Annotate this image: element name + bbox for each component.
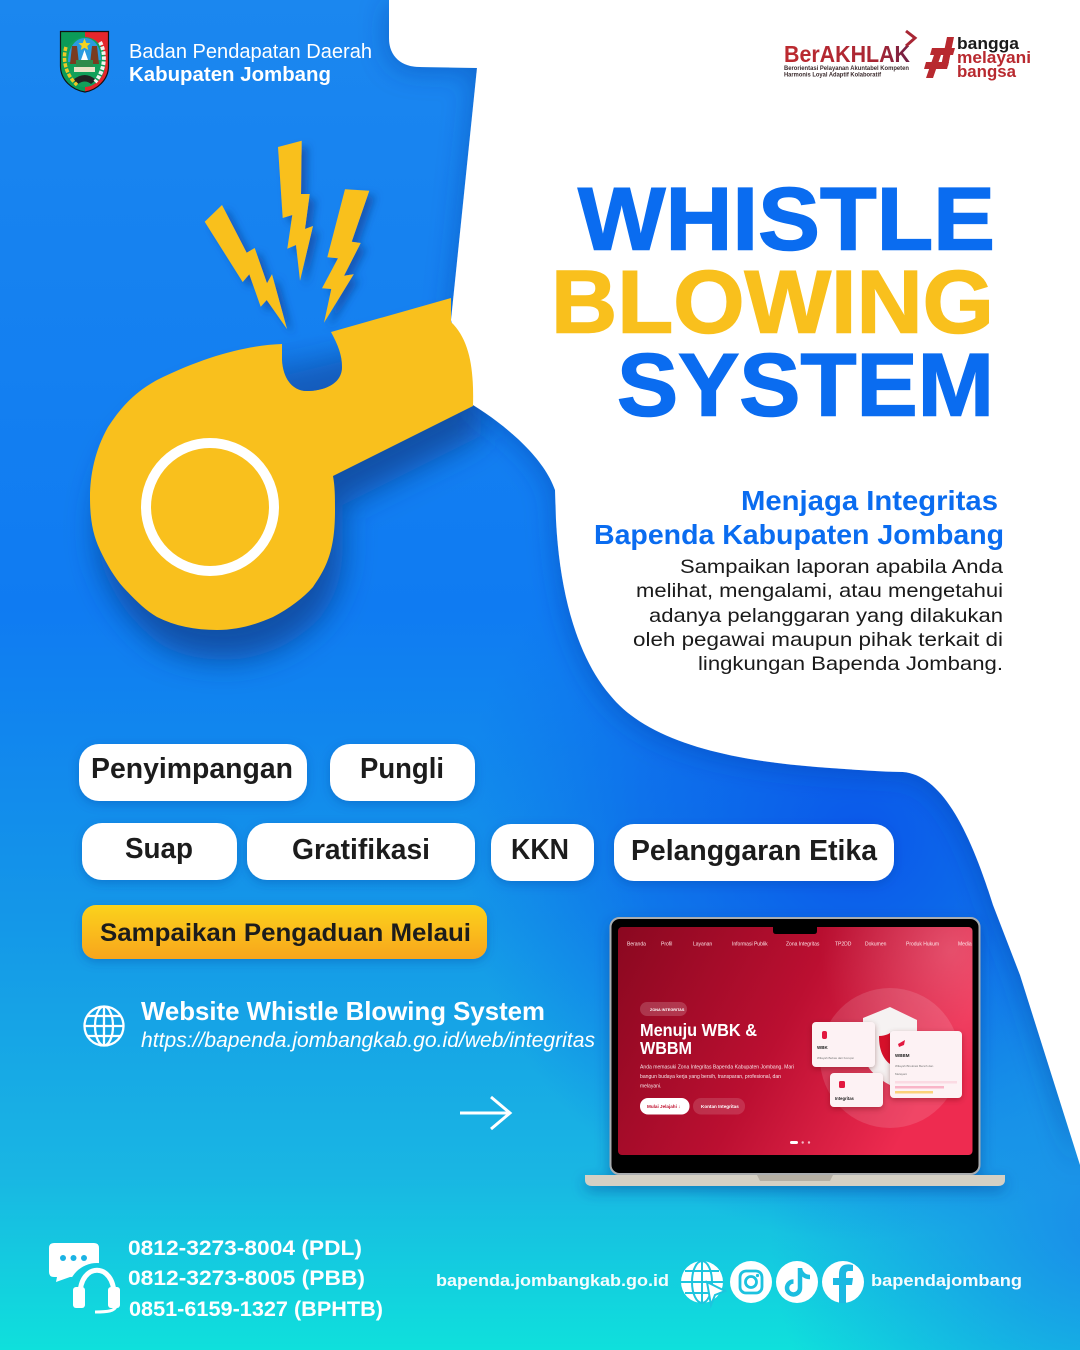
- tag: KKN: KKN: [511, 834, 569, 866]
- description text: oleh pegawai maupun pihak terkait di: [633, 629, 1003, 651]
- header: BerAKHLAK logo: BerAKHLAK: [784, 41, 910, 67]
- whistle ring: [146, 443, 274, 571]
- description text: Sampaikan laporan apabila Anda: [680, 556, 1003, 578]
- icon: lightning bolts: [205, 141, 369, 329]
- phone numbers: [128, 1237, 383, 1321]
- screen illustration: WBBM: [895, 1053, 910, 1058]
- screen illustration: Wilayah Birokrasi Bersih dan: [895, 1064, 934, 1068]
- phone numbers: 0851-6159-1327 (BPHTB): [129, 1298, 383, 1321]
- violation tags: [79, 744, 894, 881]
- subheading: Bapenda Kabupaten Jombang: [594, 519, 1004, 550]
- call to action button: Sampaikan Pengaduan Melaui: [100, 919, 471, 947]
- screen hero copy: Kontan Integritas: [701, 1104, 739, 1109]
- icon: globe: [84, 1006, 124, 1046]
- screen nav bar: TP2DD: [835, 942, 852, 948]
- tag: Pelanggaran Etika: [614, 824, 894, 881]
- call to action button: [82, 905, 487, 959]
- subheading: Menjaga Integritas: [741, 485, 998, 516]
- screen hero copy: melayani.: [640, 1084, 661, 1090]
- tag: Penyimpangan: Penyimpangan: [91, 753, 293, 785]
- screen nav bar: Produk Hukum: [906, 942, 939, 948]
- header: bangga melayani bangsa logo: bangga: [957, 34, 1020, 53]
- website address: bapenda.jombangkab.go.id: [436, 1271, 669, 1290]
- header: agency logo and name: [60, 32, 372, 92]
- icon: web globe with cursor: [681, 1261, 725, 1305]
- website link: https://bapenda.jombangkab.go.id/web/integritas: [141, 1029, 595, 1052]
- screen nav bar: Layanan: [693, 942, 712, 948]
- icon: hash symbol: [924, 37, 955, 78]
- title: WHISTLE: [578, 168, 995, 268]
- screen hero copy: bangun budaya kerja yang bersih, transparan, profesional, dan: [640, 1074, 781, 1080]
- tag: Pungli: [330, 744, 475, 801]
- tag: Penyimpangan: [79, 744, 307, 801]
- screen illustration: Melayani: [895, 1072, 907, 1076]
- phone numbers: 0812-3273-8004 (PDL): [128, 1237, 362, 1260]
- screen hero copy: Anda memasuki Zona Integritas Bapenda Kabupaten Jombang. Mari: [640, 1064, 794, 1070]
- screen illustration: [812, 988, 962, 1128]
- description text: melihat, mengalami, atau mengetahui: [636, 580, 1003, 602]
- screen hero copy: Menuju WBK &: [640, 1020, 757, 1040]
- icon: whistle: [90, 298, 473, 630]
- screen hero copy: Mulai Jelajahi ↓: [647, 1104, 680, 1109]
- tag: Gratifikasi: [247, 823, 475, 880]
- screen nav bar: [627, 942, 972, 946]
- camera notch: [773, 926, 817, 934]
- tag: Pungli: Pungli: [360, 753, 444, 785]
- tag: Suap: [82, 823, 237, 880]
- tag: Suap: Suap: [125, 833, 193, 865]
- screen nav bar: Dokumen: [865, 942, 887, 948]
- title: SYSTEM: [617, 334, 994, 434]
- tag: Gratifikasi: Gratifikasi: [292, 834, 430, 866]
- icon: instagram: [730, 1261, 772, 1303]
- phone numbers: 0812-3273-8005 (PBB): [128, 1267, 365, 1290]
- header: BerAKHLAK logo: Harmonis Loyal Adaptif Kolaboratif: [784, 72, 882, 78]
- whistle mouth hole: [282, 332, 342, 391]
- screen hero copy: [640, 1002, 794, 1114]
- laptop screen: [618, 927, 973, 1155]
- header: BerAKHLAK logo: [784, 31, 915, 78]
- header: BerAKHLAK logo: Berorientasi Pelayanan Akuntabel Kompeten: [784, 66, 909, 72]
- screen nav bar: Zona Integritas: [786, 942, 820, 948]
- screen nav bar: Profil: [661, 942, 672, 948]
- header: agency logo and name: Kabupaten Jombang: [129, 64, 331, 86]
- description text: lingkungan Bapenda Jombang.: [698, 653, 1003, 675]
- website link: [141, 996, 595, 1052]
- description text: [633, 556, 1003, 675]
- screen nav bar: Informasi Publik: [732, 942, 768, 948]
- header: bangga melayani bangsa logo: melayani: [957, 48, 1031, 67]
- tag: Pelanggaran Etika: Pelanggaran Etika: [631, 835, 878, 867]
- title: BLOWING: [551, 252, 994, 352]
- screen illustration: Integritas: [835, 1096, 855, 1101]
- whistle body: [90, 298, 473, 630]
- laptop mockup: [585, 918, 1005, 1186]
- screen nav bar: Media: [958, 942, 972, 948]
- header: bangga melayani bangsa logo: [924, 34, 1031, 81]
- screen illustration: Wilayah Bebas dari Korupsi: [817, 1056, 854, 1060]
- header: bangga melayani bangsa logo: bangsa: [957, 62, 1017, 81]
- screen hero copy: ZONA INTEGRITAS: [650, 1008, 685, 1012]
- social media handle: bapendajombang: [871, 1271, 1022, 1290]
- description text: adanya pelanggaran yang dilakukan: [649, 605, 1003, 627]
- icon: facebook: [822, 1261, 864, 1303]
- tag: KKN: [491, 824, 594, 881]
- screen carousel dots: [790, 1141, 810, 1144]
- icon: customer service headset: [49, 1243, 120, 1312]
- white curved panel: [389, 0, 1080, 1165]
- screen nav bar: Beranda: [627, 942, 646, 948]
- arrow: [460, 1097, 510, 1129]
- icon: Jombang coat of arms: [60, 32, 108, 92]
- website link: Website Whistle Blowing System: [141, 996, 545, 1026]
- agency name: Badan Pendapatan Daerah: [129, 41, 372, 63]
- subheading: [594, 485, 1004, 550]
- screen illustration: WBK: [817, 1045, 828, 1050]
- title: [551, 168, 995, 434]
- icon: tiktok: [776, 1261, 818, 1303]
- screen hero copy: WBBM: [640, 1038, 692, 1058]
- laptop body: [585, 918, 1005, 1186]
